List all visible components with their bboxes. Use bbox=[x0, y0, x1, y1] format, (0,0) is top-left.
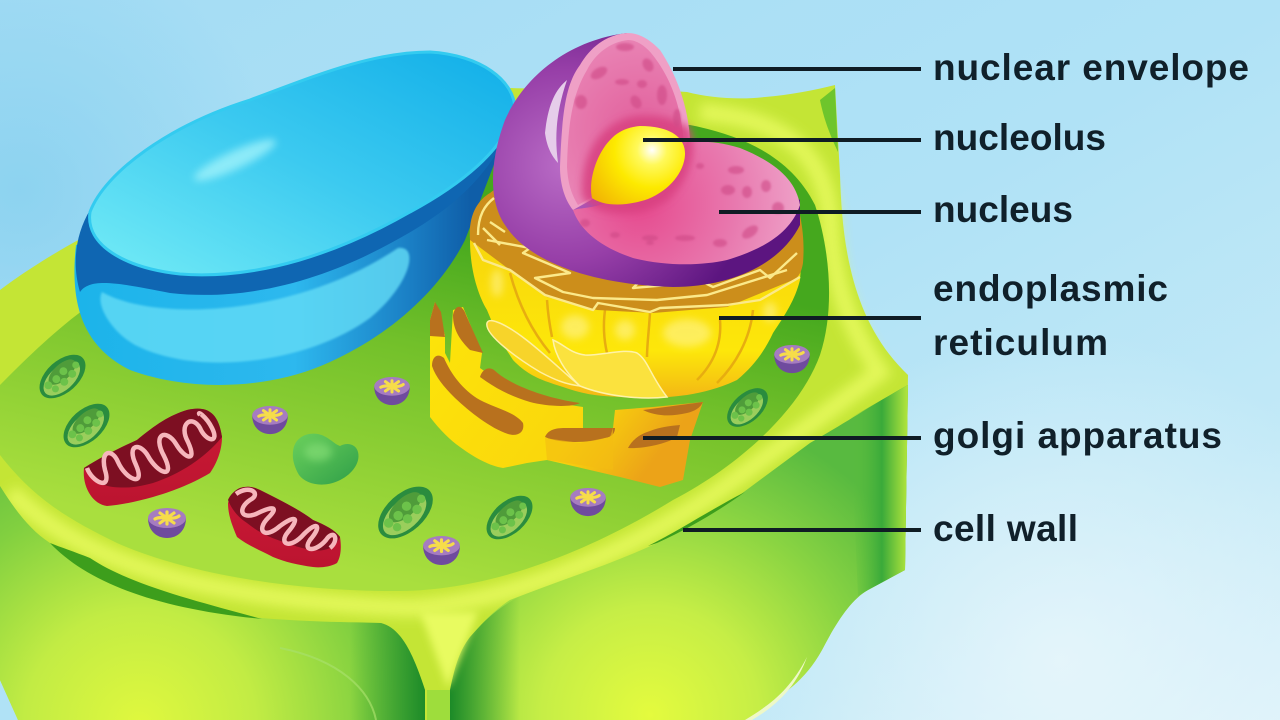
label: golgi apparatus: golgi apparatus bbox=[933, 415, 1222, 456]
corner fold bbox=[820, 88, 838, 152]
mitochondrion 1 top face bbox=[84, 409, 222, 488]
mitochondrion 2 top face bbox=[228, 487, 340, 550]
leader lines bbox=[643, 69, 921, 530]
label: nuclear envelope: nuclear envelope bbox=[933, 47, 1249, 88]
lower right wall face bbox=[450, 385, 908, 720]
right edge dark strip bbox=[850, 385, 908, 596]
green vesicle bbox=[293, 434, 358, 485]
label: reticulum: reticulum bbox=[933, 322, 1108, 363]
nucleus pink upper half rim bbox=[560, 33, 690, 210]
line: nucleolus bbox=[643, 138, 921, 142]
labels bbox=[933, 47, 1249, 549]
mitochondrion 1 inner membrane bbox=[87, 413, 214, 483]
ER highlights bbox=[491, 269, 777, 347]
ER shading folds bbox=[510, 273, 753, 383]
centre V highlight bbox=[420, 612, 478, 688]
mitochondrion 1 bbox=[84, 409, 222, 506]
golgi shading bbox=[545, 428, 613, 470]
right face gloss bbox=[745, 657, 807, 720]
chloroplast 3 bbox=[369, 477, 442, 548]
left face seam shading bbox=[350, 622, 425, 720]
chloroplasts bbox=[32, 346, 775, 548]
cell wall outer lime rim bbox=[0, 85, 908, 720]
label: cell wall: cell wall bbox=[933, 508, 1078, 549]
granule 1 bbox=[252, 406, 288, 434]
granule 6 bbox=[774, 345, 810, 373]
vacuole lower reflection bbox=[100, 248, 409, 363]
line: cell wall bbox=[683, 528, 921, 532]
chloroplast 2 bbox=[56, 395, 117, 456]
golgi apparatus bbox=[430, 302, 703, 487]
granule 3 bbox=[148, 508, 186, 538]
vacuole dark band bbox=[76, 110, 515, 295]
granule 5 bbox=[570, 488, 606, 516]
label: nucleolus: nucleolus bbox=[933, 117, 1106, 158]
lower left wall face bbox=[0, 486, 425, 720]
small purple granules bbox=[148, 345, 810, 565]
chloroplast 1 bbox=[32, 346, 93, 407]
ER bowl bbox=[470, 240, 803, 398]
endoplasmic reticulum bbox=[470, 170, 804, 398]
mitochondrion 1 body bbox=[84, 409, 222, 506]
ER lobe centre bbox=[553, 340, 667, 398]
golgi body bbox=[430, 302, 703, 487]
nucleus pores bbox=[575, 43, 784, 247]
dark shadow under rim bbox=[50, 543, 262, 619]
nucleus pink upper half bbox=[567, 40, 684, 205]
line: nuclear envelope bbox=[673, 67, 921, 71]
label: endoplasmic: endoplasmic bbox=[933, 268, 1168, 309]
vacuole highlight bbox=[190, 133, 280, 187]
nucleolus bbox=[591, 126, 685, 205]
envelope highlight bbox=[545, 80, 567, 163]
line: endoplasmic reticulum bbox=[719, 316, 921, 320]
left face curved crease bbox=[280, 648, 376, 720]
chloroplast 4 bbox=[479, 487, 540, 548]
chloroplast 5 bbox=[720, 381, 775, 434]
right rim shadow bbox=[648, 492, 745, 546]
vacuole top bbox=[90, 52, 515, 275]
ER rim stepped lines bbox=[474, 198, 800, 312]
mitochondrion 2 inner membrane bbox=[236, 490, 335, 549]
nucleus pink lower half bbox=[573, 142, 800, 264]
label: nucleus: nucleus bbox=[933, 189, 1073, 230]
nuclear envelope purple shell bbox=[493, 33, 800, 287]
ER layered rim bbox=[470, 170, 804, 313]
nucleus and nuclear envelope bbox=[493, 33, 800, 287]
line: nucleus bbox=[719, 210, 921, 214]
centre wall seam bbox=[427, 690, 450, 720]
mitochondrion 2 bbox=[228, 487, 341, 567]
granule 2 bbox=[374, 377, 410, 405]
golgi brown folds bbox=[430, 302, 703, 448]
ER lobe left bbox=[487, 321, 580, 386]
vacuole bbox=[74, 52, 515, 385]
right face seam shading bbox=[450, 596, 520, 720]
granule 4 bbox=[423, 536, 460, 565]
cell wall: plant cell body bbox=[0, 85, 908, 720]
cell interior floor bbox=[0, 120, 829, 591]
dark ring around nucleolus bbox=[582, 116, 693, 214]
rim highlight band bbox=[10, 112, 880, 608]
line: golgi apparatus bbox=[643, 436, 921, 440]
mitochondrion 2 body bbox=[228, 487, 341, 567]
vacuole lower body bbox=[74, 110, 515, 385]
